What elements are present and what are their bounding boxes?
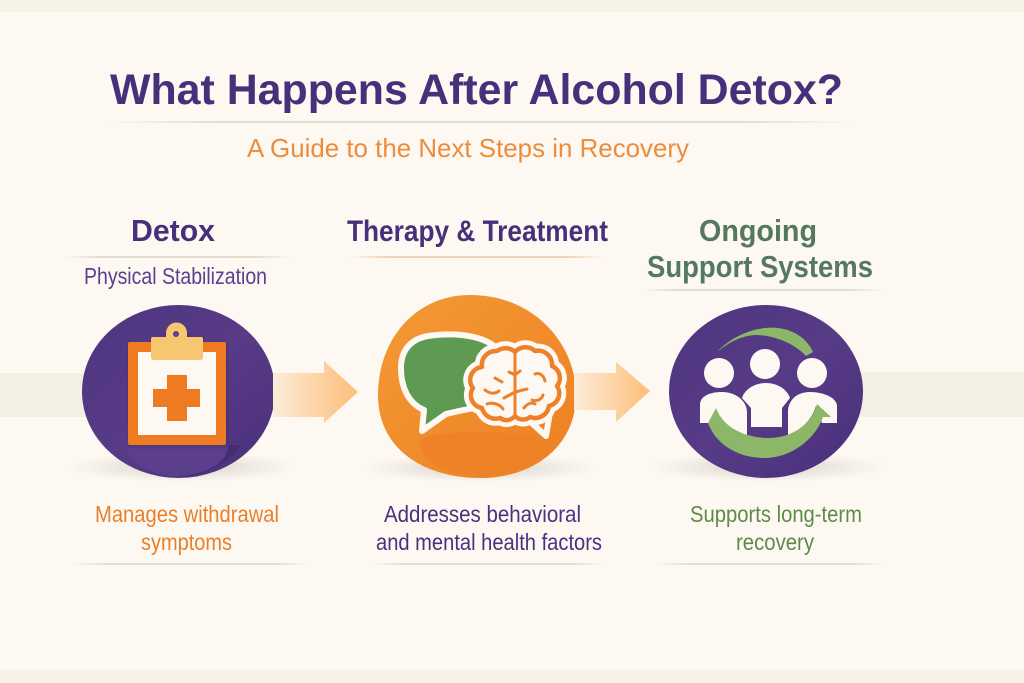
icon: green speech bubble xyxy=(401,334,500,431)
subheading: physical stabilization: Physical Stabilization xyxy=(84,263,267,289)
icon: clipboard xyxy=(128,322,226,445)
heading: detox: Detox xyxy=(131,213,216,248)
arrow: detox to therapy xyxy=(273,361,358,423)
background band: right xyxy=(855,372,1024,417)
heading: ongoing support systems xyxy=(647,213,873,284)
icon: brain xyxy=(470,347,560,436)
background band: left xyxy=(0,373,90,417)
description: supports long-term recovery: Supports long-term xyxy=(690,501,862,527)
subtitle: A Guide to the Next Steps in Recovery xyxy=(247,133,689,163)
panel: therapy and treatment xyxy=(347,215,608,565)
icon: three people xyxy=(700,349,837,435)
heading: therapy and treatment: Therapy & Treatment xyxy=(347,215,608,248)
title: What Happens After Alcohol Detox? xyxy=(110,66,843,114)
icon: purple circle with clipboard xyxy=(82,305,275,478)
panel: ongoing support systems xyxy=(640,213,885,565)
heading: ongoing support systems: Support Systems xyxy=(647,249,873,284)
icon: orange circle with speech bubble and brain xyxy=(378,295,576,478)
heading: ongoing support systems: Ongoing xyxy=(699,213,817,248)
description: supports long-term recovery: recovery xyxy=(736,529,814,555)
description: manages withdrawal symptoms xyxy=(95,501,279,555)
arrow: therapy to support xyxy=(574,362,650,422)
description: addresses behavioral and mental health factors xyxy=(376,501,602,555)
description: manages withdrawal symptoms: Manages withdrawal xyxy=(95,501,279,527)
icon: green arc top xyxy=(717,328,813,356)
description: manages withdrawal symptoms: symptoms xyxy=(141,529,232,555)
panel: detox xyxy=(65,213,310,565)
description: addresses behavioral and mental health factors: Addresses behavioral xyxy=(384,501,581,527)
description: addresses behavioral and mental health factors: and mental health factors xyxy=(376,529,602,555)
icon: purple circle with people and cycle arrows xyxy=(669,305,863,478)
icon: green arrow bottom xyxy=(708,404,831,458)
description: supports long-term recovery xyxy=(690,501,862,555)
